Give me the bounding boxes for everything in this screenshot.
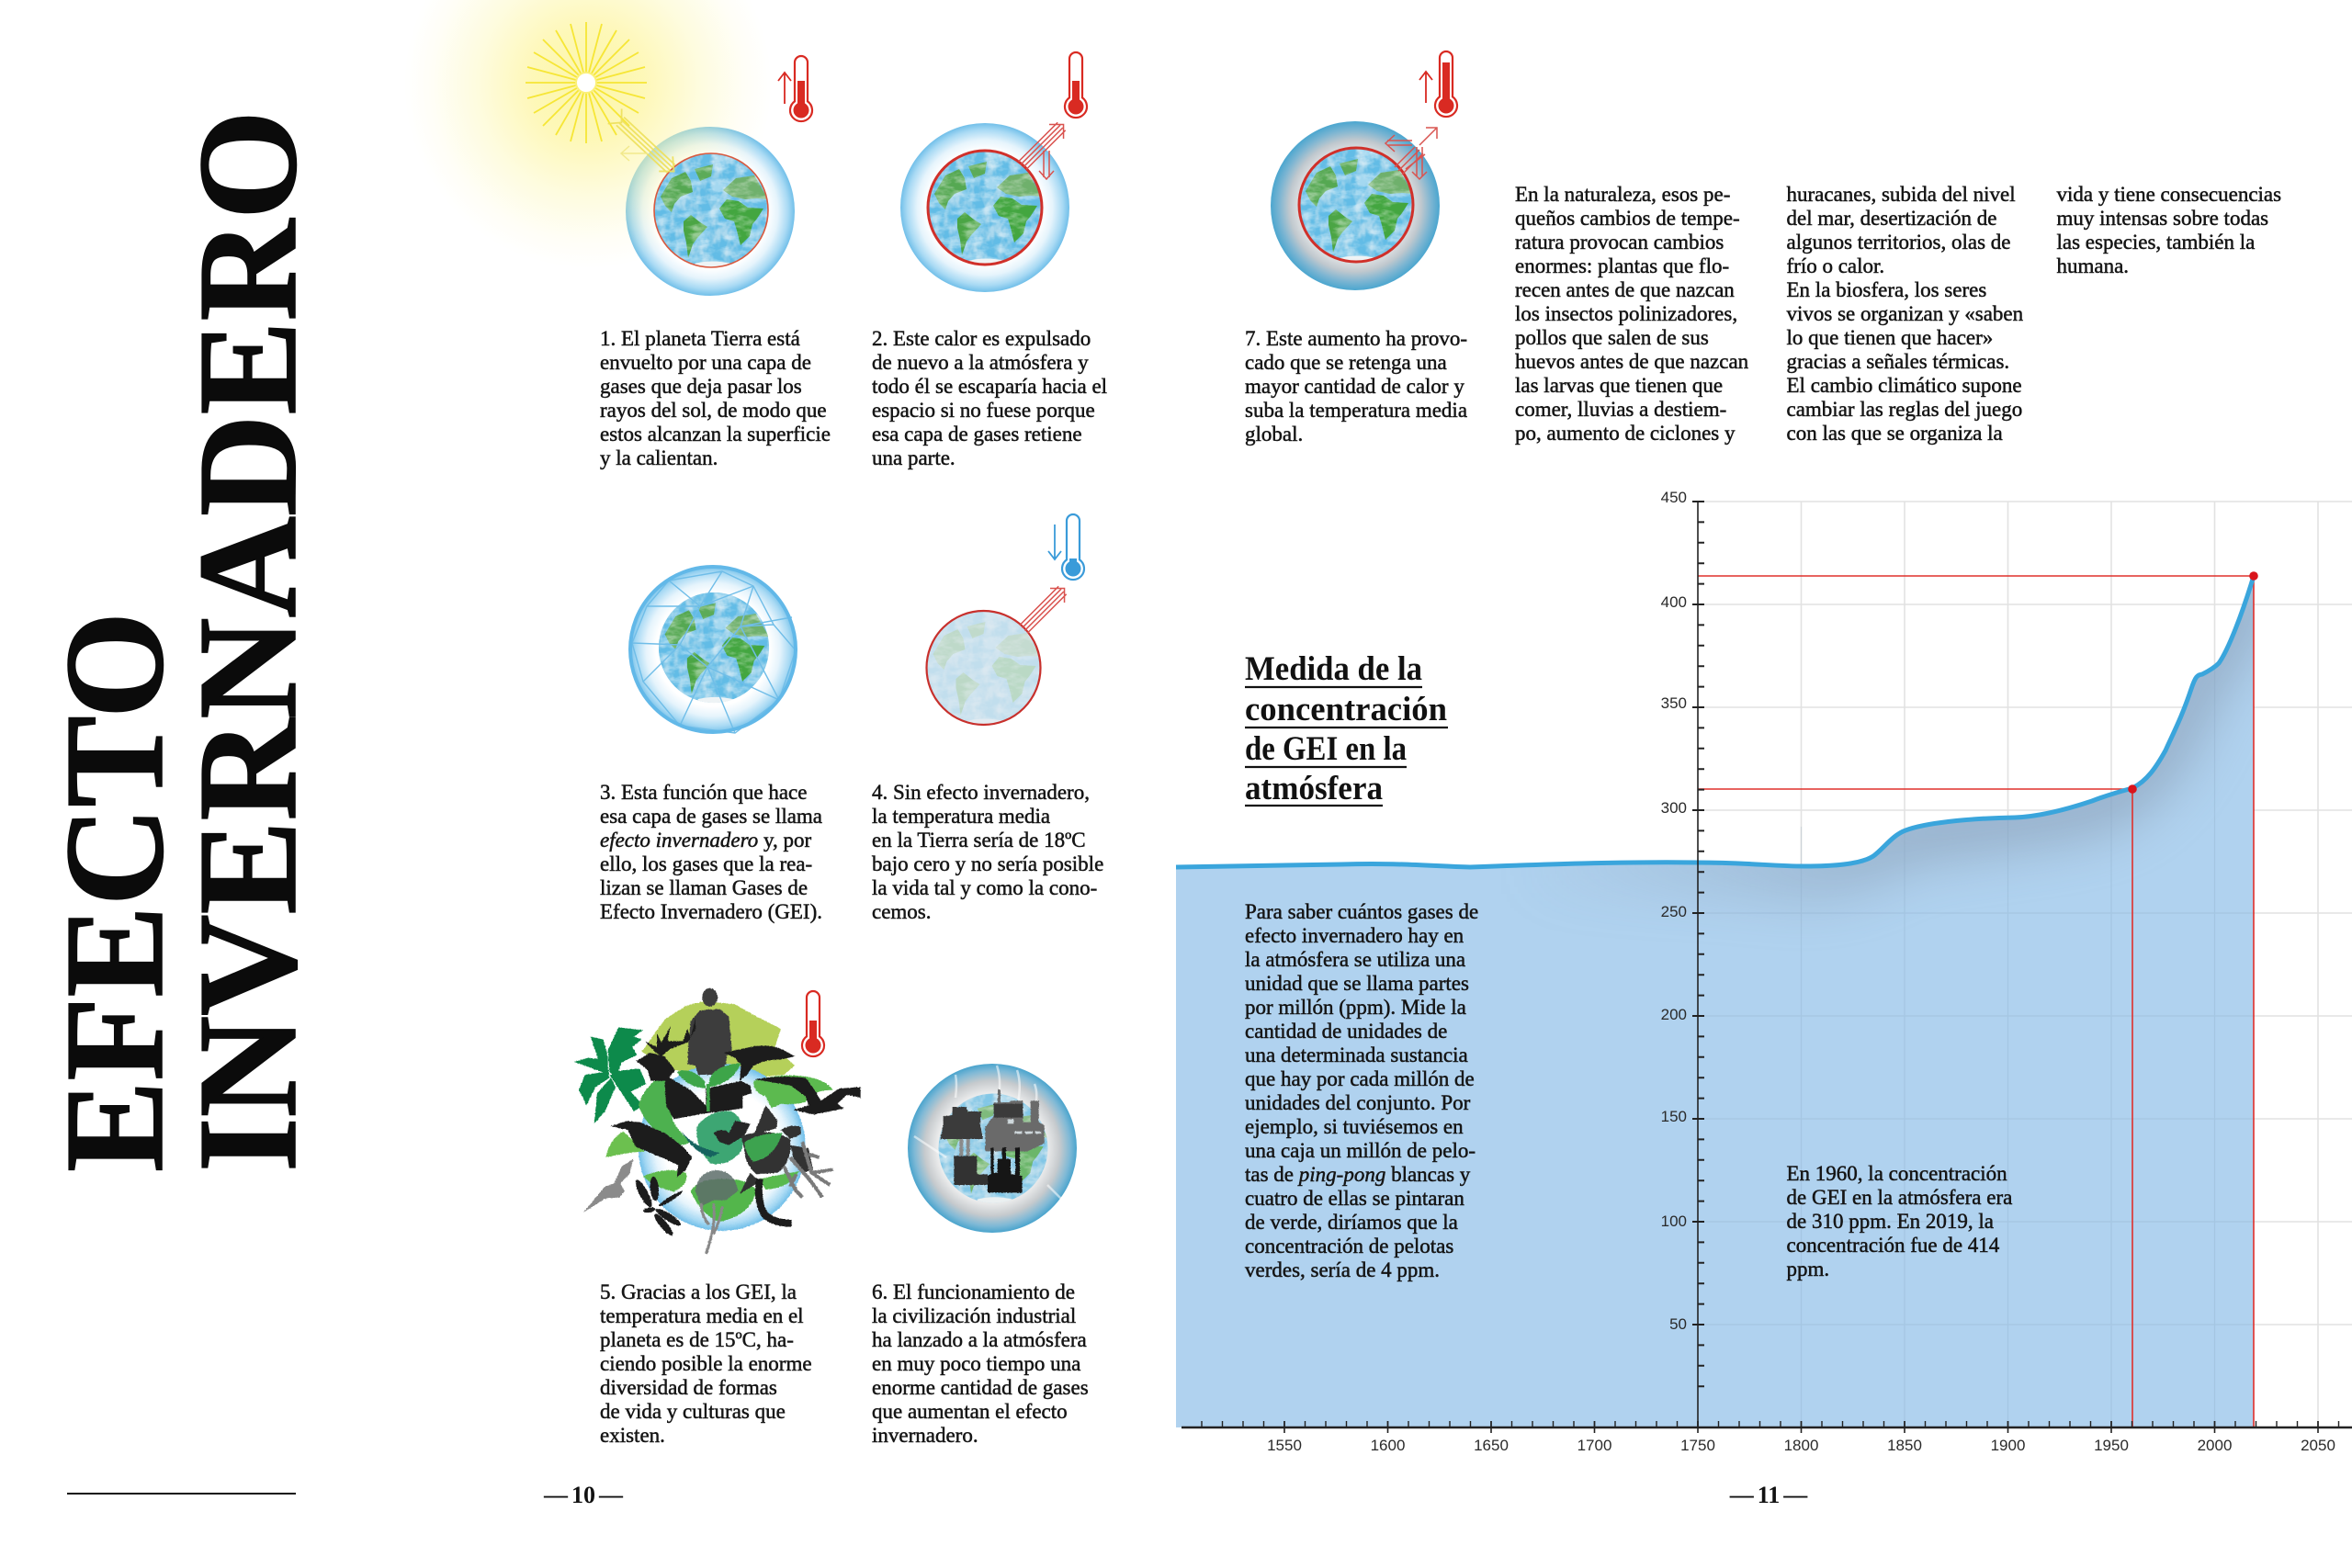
text: step 4: bajo cero y no sería posible: [872, 852, 1103, 875]
x axis labels: 1550: [1267, 1437, 1302, 1454]
x axis labels: 2000: [2198, 1437, 2232, 1454]
text: step 5: planeta es de 15ºC, ha-: [600, 1328, 794, 1351]
text column: consequences 1: recen antes de que nazcan: [1515, 278, 1735, 301]
text column: consequences 1: huevos antes de que nazcan: [1515, 350, 1749, 373]
x axis labels: 1850: [1887, 1437, 1922, 1454]
text: ppm explanation: cantidad de unidades de: [1245, 1020, 1447, 1043]
globe 1 atmosphere: [626, 127, 795, 296]
y axis labels: 300: [1661, 799, 1687, 817]
text column: consequences 3: muy intensas sobre todas: [2056, 207, 2268, 230]
text: ppm explanation: concentración de pelotas: [1245, 1235, 1453, 1258]
text column: consequences 1: comer, lluvias a destiem-: [1515, 398, 1726, 421]
heading: chart title: de GEI en la: [1245, 730, 1407, 768]
text column: consequences 2: con las que se organiza la: [1786, 422, 2003, 445]
text: step 6: enorme cantidad de gases: [872, 1376, 1089, 1399]
y axis labels: 250: [1661, 903, 1687, 920]
arrow: reflected rays: [621, 146, 648, 161]
text: ppm explanation: tas de: [1245, 1163, 1299, 1186]
text: ppm explanation: una caja un millón de pelo-: [1245, 1139, 1476, 1162]
text: step 4: en la Tierra sería de 18ºC: [872, 829, 1086, 852]
text: 1960 to 2019 values: En 1960, la concentración: [1786, 1162, 2007, 1185]
text: step 5: 5. Gracias a los GEI, la: [600, 1280, 797, 1303]
text: step 2: espacio si no fuese porque: [872, 399, 1095, 422]
text: ppm explanation: verdes, sería de 4 ppm.: [1245, 1258, 1440, 1281]
text: ppm explanation: que hay por cada millón de: [1245, 1067, 1475, 1090]
y axis labels: 150: [1661, 1108, 1687, 1125]
arrow: heat retained: [1039, 151, 1054, 179]
y axis labels: 350: [1661, 694, 1687, 712]
arrow: sun rays to earth: [608, 108, 681, 179]
y axis labels: 200: [1661, 1006, 1687, 1023]
text column: consequences 1: las larvas que tienen que: [1515, 374, 1723, 397]
person: [687, 988, 732, 1075]
deer: [637, 1018, 752, 1119]
heading: chart title: Medida de la: [1245, 650, 1422, 688]
y axis labels: 400: [1661, 593, 1687, 611]
text: step 6: que aumentan el efecto: [872, 1400, 1068, 1423]
y axis: [1692, 502, 1704, 1427]
text: step 6: en muy poco tiempo una: [872, 1352, 1080, 1375]
text: step 1: rayos del sol, de modo que: [600, 399, 827, 422]
dragonfly: [633, 1176, 684, 1237]
x axis labels: [1267, 1437, 2335, 1454]
x axis labels: 1600: [1371, 1437, 1405, 1454]
snake: [759, 1179, 792, 1224]
jellyfish: [695, 1170, 738, 1254]
dolphin: [724, 1045, 796, 1081]
text column: consequences 1: queños cambios de tempe-: [1515, 207, 1740, 230]
globe 7: heat retained: [1271, 121, 1440, 290]
text: ppm explanation: efecto invernadero hay en: [1245, 924, 1464, 947]
palm: [574, 1027, 646, 1123]
marker 1960: [2128, 784, 2137, 794]
illustration: life on earth: [574, 988, 861, 1254]
grey bird: [583, 1159, 633, 1213]
grid: [1698, 502, 2352, 1427]
text: step 3: esa capa de gases se llama: [600, 805, 822, 828]
text: step 1: envuelto por una capa de: [600, 351, 811, 374]
text: step 6: invernadero.: [872, 1424, 978, 1447]
text: ppm explanation: ping-pong blancas y: [1299, 1163, 1470, 1186]
text column: consequences 2: El cambio climático supone: [1786, 374, 2022, 397]
area shading: [1516, 576, 2254, 871]
text column: consequences 3: humana.: [2056, 254, 2129, 277]
text: 1960 to 2019 values: concentración fue de 414: [1786, 1234, 2000, 1257]
text column: consequences 1: po, aumento de ciclones y: [1515, 422, 1736, 445]
factories: [940, 1089, 1045, 1192]
title: efecto invernadero: EFECTO: [37, 612, 193, 1172]
text: step 1: gases que deja pasar los: [600, 375, 802, 398]
globe 6: industrial pollution: [908, 1064, 1077, 1233]
text column: consequences 1: pollos que salen de sus: [1515, 326, 1709, 349]
text: step 7: 7. Este aumento ha provo-: [1245, 327, 1467, 350]
x axis labels: 1650: [1474, 1437, 1509, 1454]
sun glow: [404, 0, 772, 268]
rule under title: [67, 1493, 296, 1495]
x axis labels: 2050: [2301, 1437, 2335, 1454]
text column: consequences 3: las especies, también la: [2056, 231, 2255, 254]
text: ppm explanation: unidades del conjunto. Por: [1245, 1091, 1471, 1114]
text: step 7: cado que se retenga una: [1245, 351, 1447, 374]
turtle: [740, 1105, 813, 1194]
title: efecto invernadero: [37, 110, 326, 1172]
icon: sun: [526, 22, 647, 143]
text column: consequences 2: cambiar las reglas del juego: [1786, 398, 2022, 421]
icon: thermometer 5: [802, 991, 824, 1056]
y axis labels: [1661, 489, 1687, 1333]
icon: thermometer 1: [778, 56, 812, 121]
text: step 5: ciendo posible la enorme: [600, 1352, 812, 1375]
page number 10: — 10 —: [543, 1482, 624, 1508]
red guides: [1698, 576, 2254, 1427]
text: 1960 to 2019 values: ppm.: [1786, 1258, 1829, 1280]
text column: consequences 2: gracias a señales térmicas.: [1786, 350, 2009, 373]
text: step 2: de nuevo a la atmósfera y: [872, 351, 1089, 374]
text: ppm explanation: la atmósfera se utiliza una: [1245, 948, 1465, 971]
heading: chart title: [1245, 650, 1448, 807]
area fill: [1176, 576, 2254, 1427]
lizard: [682, 1131, 719, 1157]
text column: consequences 1: En la naturaleza, esos pe-: [1515, 183, 1730, 206]
x axis labels: 1700: [1577, 1437, 1611, 1454]
text column: consequences 2: vivos se organizan y «saben: [1786, 302, 2024, 325]
text: step 2: esa capa de gases retiene: [872, 423, 1082, 446]
text: 1960 to 2019 values: de 310 ppm. En 2019, la: [1786, 1210, 1994, 1233]
text column: consequences 1: enormes: plantas que flo-: [1515, 254, 1729, 277]
arrow: heat escaping: [1016, 581, 1071, 637]
flower: [714, 1121, 751, 1145]
text: step 7: suba la temperatura media: [1245, 399, 1467, 422]
text: step 5: de vida y culturas que: [600, 1400, 786, 1423]
text column: consequences 1: ratura provocan cambios: [1515, 231, 1724, 254]
text: ppm explanation: Para saber cuántos gases de: [1245, 900, 1478, 923]
icon: thermometer 7: [1419, 51, 1457, 117]
text: step 4: la temperatura media: [872, 805, 1050, 828]
text: 1960 to 2019 values: de GEI en la atmósfera era: [1786, 1186, 2012, 1209]
text column: consequences 2: algunos territorios, olas de: [1786, 231, 2011, 254]
text column: consequences 2: huracanes, subida del nivel: [1786, 183, 2016, 206]
globe 3: gas mesh: [629, 566, 797, 733]
leaves: [605, 1073, 833, 1222]
x axis: [1182, 1421, 2352, 1433]
text: step 2: 2. Este calor es expulsado: [872, 327, 1091, 350]
text: step 7: mayor cantidad de calor y: [1245, 375, 1464, 398]
center leaves: [677, 1063, 741, 1111]
concentration curve: [1176, 576, 2254, 867]
crow: [610, 1122, 692, 1178]
text: ppm explanation: cuatro de ellas se pintaran: [1245, 1187, 1464, 1210]
text: ppm explanation: una determinada sustancia: [1245, 1043, 1468, 1066]
text: step 4: la vida tal y como la cono-: [872, 876, 1097, 899]
globe 1: earth: [654, 153, 768, 271]
text: step 4: 4. Sin efecto invernadero,: [872, 781, 1090, 804]
text: step 1: y la calientan.: [600, 446, 718, 469]
title: efecto invernadero: INVERNADERO: [170, 110, 326, 1172]
globe 2: heat released: [900, 123, 1069, 292]
chart: GEI concentration area chart: [1176, 489, 2352, 1454]
globe 4: frozen earth: [926, 611, 1040, 728]
x axis labels: 1900: [1991, 1437, 2025, 1454]
marker 2019: [2249, 571, 2258, 581]
text: ppm explanation: ejemplo, si tuviésemos en: [1245, 1115, 1464, 1138]
seabird: [755, 1077, 861, 1114]
text: ppm explanation: por millón (ppm). Mide la: [1245, 996, 1466, 1019]
y axis labels: 450: [1661, 489, 1687, 506]
text column: consequences 2: En la biosfera, los seres: [1786, 278, 1986, 301]
text: step 3: 3. Esta función que hace: [600, 781, 807, 804]
coral: [784, 1142, 833, 1197]
text: step 6: ha lanzado a la atmósfera: [872, 1328, 1087, 1351]
x axis labels: 1800: [1784, 1437, 1818, 1454]
heading: chart title: concentración: [1245, 691, 1447, 728]
text: step 6: 6. El funcionamiento de: [872, 1280, 1075, 1303]
arrows: heat trapped: [1385, 128, 1437, 179]
text: step 2: una parte.: [872, 446, 956, 469]
text: step 3: efecto invernadero: [600, 829, 758, 852]
text column: consequences 3: vida y tiene consecuencias: [2056, 183, 2281, 206]
x axis labels: 1750: [1680, 1437, 1715, 1454]
text column: consequences 2: lo que tienen que hacer»: [1786, 326, 1993, 349]
teal circle leaf: [696, 1111, 744, 1164]
text: ppm explanation: unidad que se llama partes: [1245, 972, 1469, 995]
grid over area: [1698, 666, 2254, 1427]
text: step 3: lizan se llaman Gases de: [600, 876, 808, 899]
text: step 6: la civilización industrial: [872, 1304, 1076, 1327]
tree backdrop: [641, 1001, 795, 1077]
text column: consequences 2: del mar, desertización de: [1786, 207, 1996, 230]
text: step 3: y, por: [758, 829, 811, 852]
text: step 5: existen.: [600, 1424, 665, 1447]
text: step 1: 1. El planeta Tierra está: [600, 327, 800, 350]
text column: consequences 2: frío o calor.: [1786, 254, 1884, 277]
text: step 2: todo él se escaparía hacia el: [872, 375, 1107, 398]
y axis labels: 50: [1669, 1315, 1687, 1333]
icon: thermometer 2: [1065, 52, 1087, 118]
x axis labels: 1950: [2094, 1437, 2129, 1454]
text: step 3: Efecto Invernadero (GEI).: [600, 900, 822, 923]
y axis labels: 100: [1661, 1213, 1687, 1230]
text: step 5: temperatura media en el: [600, 1304, 804, 1327]
icon: cold thermometer: [1048, 514, 1084, 580]
page number 11: — 11 —: [1729, 1482, 1808, 1508]
text: ppm explanation: de verde, diríamos que la: [1245, 1211, 1458, 1234]
globe base: [639, 1064, 806, 1231]
text column: consequences 1: los insectos polinizadores,: [1515, 302, 1737, 325]
text: step 3: ello, los gases que la rea-: [600, 852, 812, 875]
text: step 1: estos alcanzan la superficie: [600, 423, 831, 446]
text: step 7: global.: [1245, 423, 1303, 446]
text: step 4: cemos.: [872, 900, 932, 923]
heading: chart title: atmósfera: [1245, 770, 1383, 807]
arrow: heat to space: [1015, 118, 1070, 173]
text: step 5: diversidad de formas: [600, 1376, 777, 1399]
